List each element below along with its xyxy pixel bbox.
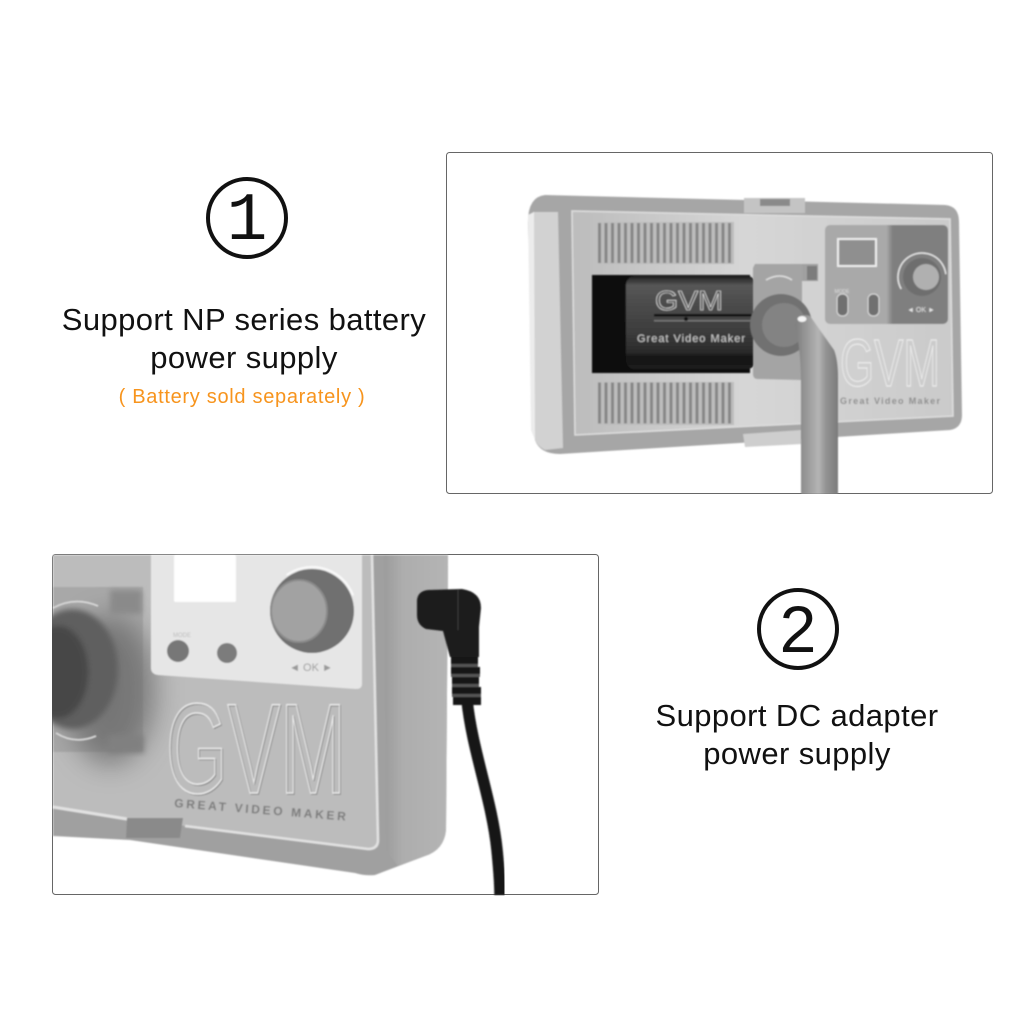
battery: GVM [655,285,723,316]
light body close-up: GVM [166,678,346,821]
number 2 icon: 2 [780,592,816,666]
light body close-up [26,550,448,875]
light body: Great Video Maker [840,396,940,406]
DC cable [417,589,500,895]
light body: ◄ OK ► [907,307,935,314]
text: battery support: power supply [150,340,338,375]
light body: MODE [834,289,850,295]
light body: GVM [840,326,940,401]
text: battery support [62,302,426,375]
battery: Great Video Maker [637,333,745,345]
text: battery note: ( Battery sold separately ) [119,386,365,408]
text: DC support: power supply [703,736,891,771]
text: DC support [656,698,938,771]
light body [528,195,962,454]
light body close-up: GREAT VIDEO MAKER [174,796,347,824]
number 2 icon [757,588,839,670]
light body close-up: GVM [167,679,347,822]
mount and stand [750,264,838,494]
light body close-up: ◄ OK ► [289,662,333,674]
text: battery support: Support NP series battery [62,302,426,337]
text: DC support: Support DC adapter [656,698,938,733]
battery [592,275,756,373]
number 1 icon: 1 [227,183,267,259]
light body close-up: MODE [173,633,191,639]
panel: DC adapter photo [52,554,599,896]
number 1 icon [206,177,288,259]
panel: battery photo [446,152,993,494]
